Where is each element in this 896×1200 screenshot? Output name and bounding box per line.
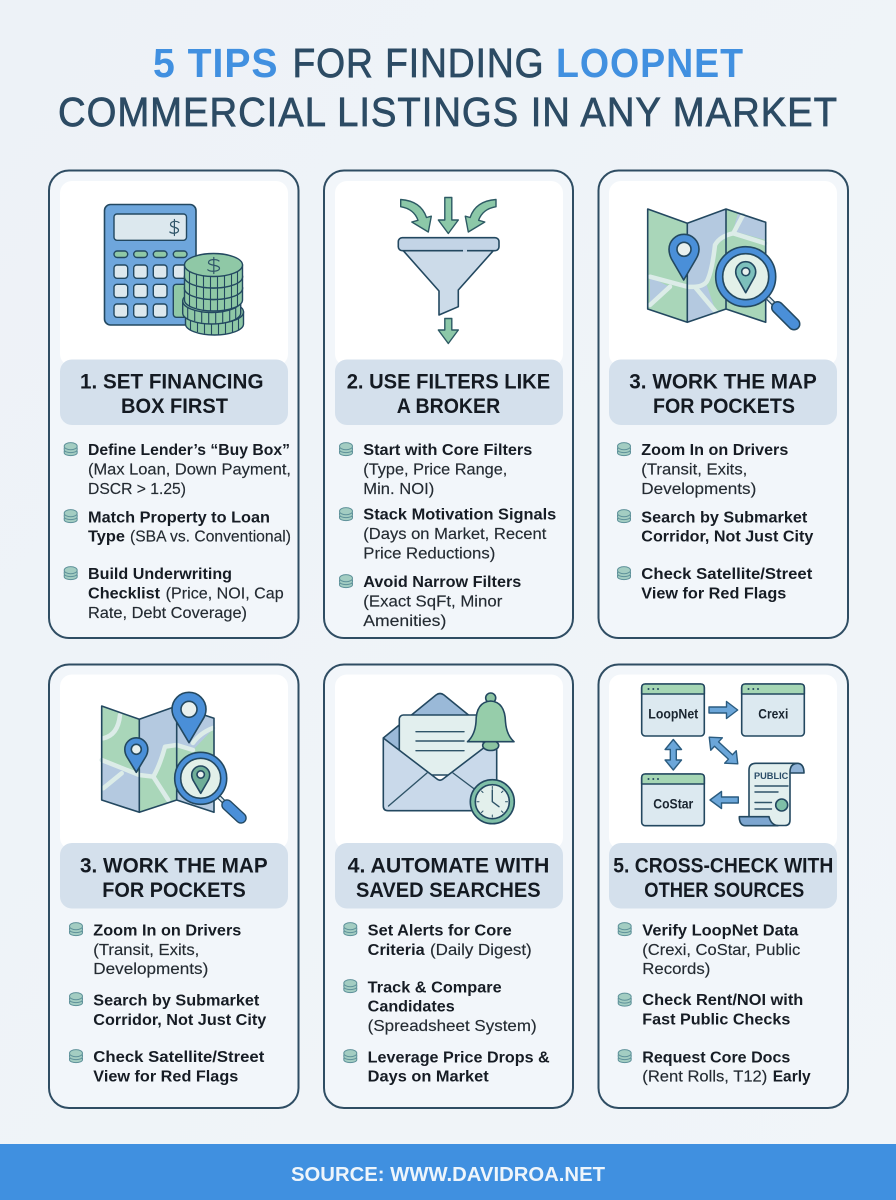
arrow: LoopNet and CoStar (665, 740, 682, 770)
tip: define lender's buy box: DSCR > 1.25) (88, 481, 186, 498)
icon: envelope with bell and clock (383, 693, 514, 824)
tip: match property to loan type: Match Property to Loan (88, 510, 270, 526)
heading: 2. use filters like a broker: A BROKER (397, 395, 500, 418)
tip: start with core filters (340, 442, 532, 498)
tip: request core docs (618, 1049, 811, 1086)
tip: stack motivation signals: Price Reductions) (363, 546, 495, 562)
tip: leverage price drops (344, 1049, 550, 1086)
tip: check satellite/street view (618, 566, 813, 602)
heading: 1. set financing box first: 1. SET FINANCING (80, 370, 264, 394)
panel: 2. use filters like a broker (324, 170, 573, 638)
icon: calculator and coins (104, 204, 244, 335)
tip: zoom in on drivers (618, 442, 788, 498)
tip: build underwriting checklist (64, 566, 284, 622)
tip: build underwriting checklist: (Price, NOI, Cap (166, 586, 284, 602)
tip: search by submarket corridor (70, 992, 266, 1029)
footer: source banner: SOURCE: WWW.DAVIDROA.NET (291, 1164, 605, 1186)
heading: 4. automate with saved searches (335, 843, 563, 908)
tip: check satellite/street view: Check Satellite/Street (641, 566, 813, 583)
tip: check rent/noi: Check Rent/NOI with (642, 992, 803, 1009)
tip: zoom in on drivers (70, 922, 241, 978)
icon: funnel with arrows (398, 198, 499, 344)
tip: leverage price drops: Leverage Price Drops & (368, 1049, 550, 1066)
heading: 3. work the map for pockets: FOR POCKETS (102, 879, 246, 902)
tip: match property to loan type: (SBA vs. Conventional) (130, 528, 291, 546)
tip: define lender's buy box: Define Lender’s “Buy Box” (88, 442, 290, 459)
tip: define lender's buy box (64, 442, 291, 498)
icon: map with pin and magnifier (648, 209, 794, 324)
icon: map with two pins and magnifier (102, 692, 241, 818)
title: COMMERCIAL LISTINGS IN ANY MARKET (58, 89, 838, 135)
document: public records (739, 763, 804, 826)
window: Crexi (742, 684, 804, 736)
window: CoStar (642, 774, 704, 826)
tip: search by submarket corridor: Search by Submarket (93, 992, 260, 1010)
tip: match property to loan type (64, 510, 291, 546)
tip: zoom in on drivers: Zoom In on Drivers (641, 442, 788, 459)
heading: 5. cross-check with other sources (609, 843, 837, 908)
panel: 3. work the map for pockets (598, 170, 848, 638)
tip: check rent/noi: Fast Public Checks (642, 1011, 790, 1028)
tip: track and compare candidates: Track & Compare (368, 979, 502, 996)
tip: request core docs: Early (773, 1069, 811, 1086)
tip: zoom in on drivers: Developments) (93, 961, 208, 978)
panel: 5. cross-check with other sources (598, 664, 848, 1108)
heading: 3. work the map for pockets: 3. WORK THE MAP (80, 854, 268, 878)
tip: zoom in on drivers: Developments) (641, 481, 756, 498)
icon: linked data sources (642, 684, 804, 826)
tip: search by submarket corridor (618, 510, 813, 546)
arrow: LoopNet and public records (703, 731, 744, 770)
title: 5 TIPS (153, 40, 278, 86)
tip: stack motivation signals: Stack Motivation Signals (363, 506, 556, 524)
footer: source banner (0, 1144, 896, 1200)
heading: 1. set financing box first: BOX FIRST (121, 395, 228, 418)
heading: 3. work the map for pockets: FOR POCKETS (653, 395, 795, 418)
panel: 3. work the map for pockets (second) (49, 664, 298, 1108)
tip: verify loopnet data: Records) (642, 961, 710, 978)
tip: set alerts for core criteria: Set Alerts for Core (368, 923, 512, 940)
tip: start with core filters: Start with Core Filters (363, 442, 532, 459)
tip: stack motivation signals (340, 506, 556, 562)
tip: verify loopnet data: Verify LoopNet Data (642, 923, 798, 940)
tip: avoid narrow filters: Avoid Narrow Filters (363, 574, 521, 591)
tip: build underwriting checklist: Build Underwriting (88, 566, 232, 583)
tip: search by submarket corridor: Search by Submarket (641, 510, 808, 526)
document: public records: PUBLIC (754, 771, 788, 782)
tip: avoid narrow filters (340, 574, 521, 630)
tip: search by submarket corridor: Corridor, Not Just City (641, 529, 813, 546)
window: CoStar: CoStar (653, 796, 694, 811)
tip: build underwriting checklist: Rate, Debt Coverage) (88, 605, 247, 622)
tip: track and compare candidates: Candidates (368, 999, 455, 1016)
heading: 5. cross-check with other sources: OTHER SOURCES (644, 879, 804, 902)
tip: check satellite/street view (70, 1049, 265, 1086)
heading: 3. work the map for pockets (60, 843, 288, 908)
tip: search by submarket corridor: Corridor, Not Just City (93, 1012, 266, 1029)
arrow: LoopNet to Crexi (709, 702, 738, 718)
heading: 4. automate with saved searches: SAVED SEARCHES (356, 879, 541, 902)
title: FOR FINDING (292, 40, 544, 86)
heading: 1. set financing box first (60, 360, 288, 425)
tip: check satellite/street view: Check Satellite/Street (93, 1049, 265, 1066)
tip: zoom in on drivers: (Transit, Exits, (93, 942, 199, 959)
tip: set alerts for core criteria (344, 923, 532, 959)
window: LoopNet (642, 684, 704, 736)
tip: leverage price drops: Days on Market (368, 1069, 489, 1086)
tip: define lender's buy box: (Max Loan, Down Payment, (88, 462, 291, 478)
panel: 4. automate with saved searches (324, 664, 573, 1108)
heading: 4. automate with saved searches: 4. AUTOMATE WITH (348, 854, 549, 878)
tip: request core docs: Request Core Docs (642, 1049, 790, 1066)
tip: track and compare candidates (344, 979, 537, 1035)
tip: check rent/noi (618, 992, 803, 1028)
heading: 3. work the map for pockets (609, 360, 837, 425)
tip: stack motivation signals: (Days on Market, Recent (363, 526, 547, 543)
tip: zoom in on drivers: (Transit, Exits, (641, 462, 747, 478)
tip: start with core filters: (Type, Price Range, (363, 462, 507, 478)
heading: 2. use filters like a broker: 2. USE FILTERS LIKE (347, 370, 550, 394)
tip: verify loopnet data: (Crexi, CoStar, Public (642, 942, 800, 959)
arrow: public records to CoStar (710, 792, 738, 808)
tip: set alerts for core criteria: Criteria (368, 942, 425, 959)
tip: avoid narrow filters: (Exact SqFt, Minor (363, 594, 503, 610)
tip: build underwriting checklist: Checklist (88, 586, 161, 602)
tip: verify loopnet data (618, 923, 800, 978)
tip: zoom in on drivers: Zoom In on Drivers (93, 922, 241, 940)
tip: check satellite/street view: View for Red Flags (641, 586, 786, 602)
tip: avoid narrow filters: Amenities) (363, 613, 446, 630)
window: Crexi: Crexi (758, 706, 788, 721)
panel: 1. set financing box first (49, 170, 298, 638)
tip: track and compare candidates: (Spreadsheet System) (368, 1018, 537, 1035)
tip: match property to loan type: Type (88, 528, 125, 546)
window: LoopNet: LoopNet (648, 706, 699, 721)
tip: start with core filters: Min. NOI) (363, 481, 434, 498)
tip: request core docs: (Rent Rolls, T12) (642, 1069, 767, 1086)
tip: check satellite/street view: View for Red Flags (93, 1068, 238, 1086)
tip: set alerts for core criteria: (Daily Digest) (430, 942, 532, 959)
heading: 3. work the map for pockets: 3. WORK THE MAP (629, 370, 817, 394)
heading: 5. cross-check with other sources: 5. CROSS-CHECK WITH (613, 854, 833, 878)
title: LOOPNET (556, 40, 744, 86)
heading: 2. use filters like a broker (335, 360, 563, 425)
title (58, 40, 838, 135)
